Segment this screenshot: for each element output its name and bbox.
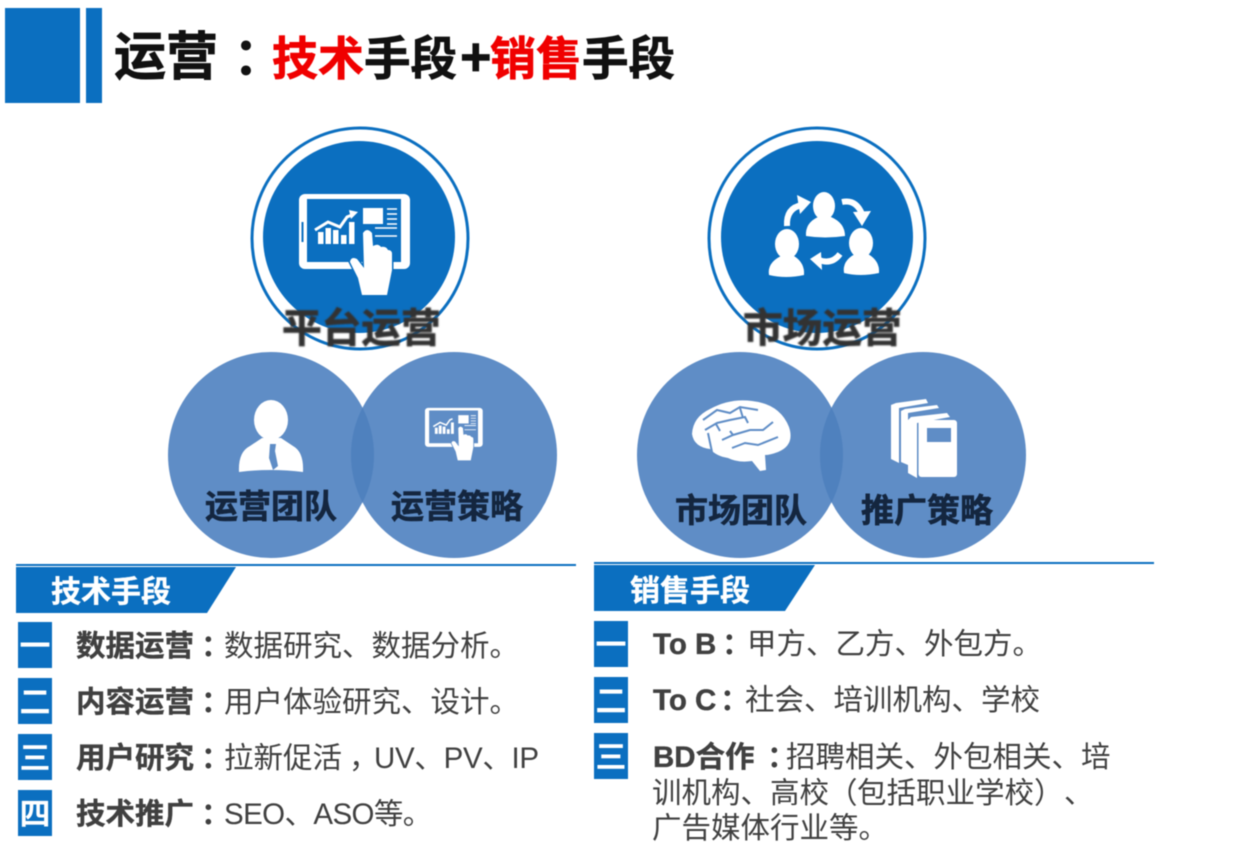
title: 手段 <box>582 33 675 85</box>
item 4: technical promotion: ： <box>201 791 231 833</box>
title: + <box>460 27 492 87</box>
item 1: data operations: 一 <box>20 621 50 666</box>
title: 手段 <box>364 33 457 85</box>
icon: books <box>891 399 957 478</box>
item 3: BD cooperation: 三 <box>596 732 626 777</box>
item 1: To B: ： <box>722 621 752 663</box>
heading: market operations: 市场运营 <box>743 307 902 351</box>
item 2: To C: 二 <box>596 676 626 721</box>
item 2: To C: ： <box>720 677 750 719</box>
item 3: BD cooperation: 、 <box>1064 777 1094 810</box>
label: promotion strategy: 推广策略 <box>861 492 993 529</box>
item 3: BD cooperation: ： <box>767 734 797 776</box>
circle: market team <box>637 352 843 558</box>
item 2: To C: 社会、培训机构、学校 <box>745 684 1040 717</box>
item 4: technical promotion: 四 <box>20 789 50 834</box>
item 3: user research: 三 <box>20 733 50 778</box>
item 3: user research: UV、PV、IP <box>374 742 539 775</box>
label: operations team: 运营团队 <box>205 488 337 525</box>
item 1: To B: To B <box>653 628 716 661</box>
banner: technical means <box>16 567 236 613</box>
label: operations strategy: 运营策略 <box>391 488 523 525</box>
item 3: BD cooperation <box>594 732 1111 845</box>
item 2: content operations: 二 <box>20 677 50 722</box>
title: 销售 <box>490 33 582 85</box>
circle: promotion strategy <box>820 352 1026 558</box>
badge: market operations <box>709 128 925 349</box>
title: 运营 <box>114 29 218 87</box>
overlap: market circles <box>820 408 843 502</box>
icon: brain <box>692 400 791 471</box>
banner: sales means: 销售手段 <box>630 575 750 608</box>
item 1: data operations: 数据研究、数据分析。 <box>224 630 519 663</box>
circle: operations team <box>168 352 374 558</box>
item 3: BD cooperation: 包括职业学校 <box>857 777 1034 810</box>
item 3: BD cooperation: 训机构、高校 <box>652 777 829 810</box>
header mark <box>5 8 102 103</box>
item 2: content operations: 用户体验研究、设计。 <box>224 686 519 719</box>
item 3: BD cooperation: BD合作 <box>653 741 755 774</box>
circle: operations strategy <box>351 352 557 558</box>
heading: platform operations: 平台运营 <box>282 307 441 351</box>
item 3: user research: 用户研究 <box>76 742 194 775</box>
item 4: technical promotion: 技术推广 <box>76 798 194 831</box>
title: 技术 <box>272 33 364 85</box>
item 1: To B <box>594 620 1042 667</box>
overlap: operations circles <box>351 408 374 502</box>
title: ： <box>233 15 285 90</box>
item 3: user research: ， <box>349 735 379 777</box>
item 2: To C: To C <box>653 684 716 717</box>
badge: platform operations <box>252 128 468 349</box>
item 3: user research <box>18 733 539 780</box>
item 4: technical promotion <box>18 789 432 836</box>
item 4: technical promotion: SEO、ASO等。 <box>224 798 432 831</box>
item 3: BD cooperation: （ <box>828 777 858 810</box>
icon: three people with cycle arrows <box>769 192 879 277</box>
panel: sales means <box>594 562 1154 845</box>
item 1: To B: 一 <box>596 620 626 665</box>
panel: technical means <box>16 564 576 836</box>
item 3: BD cooperation: 招聘相关、外包相关、培 <box>786 741 1111 774</box>
item 1: data operations: ： <box>201 623 231 665</box>
item 2: content operations <box>18 677 519 724</box>
item 3: BD cooperation: 广告媒体行业等。 <box>652 812 888 845</box>
icon: person in suit <box>239 400 303 472</box>
banner: sales means <box>594 565 815 611</box>
icon: tablet with touch hand <box>299 194 410 295</box>
item 1: data operations <box>18 621 519 668</box>
item 1: data operations: 数据运营 <box>76 630 194 663</box>
item 1: To B: 甲方、乙方、外包方。 <box>747 628 1042 661</box>
icon: small tablet with touch hand <box>425 408 483 460</box>
label: market team: 市场团队 <box>675 492 807 529</box>
item 3: user research: ： <box>201 735 231 777</box>
item 2: content operations: 内容运营 <box>76 686 194 719</box>
banner: technical means: 技术手段 <box>51 576 171 609</box>
item 2: To C <box>594 676 1040 723</box>
item 3: user research: 拉新促活 <box>224 742 342 775</box>
item 2: content operations: ： <box>201 679 231 721</box>
item 3: BD cooperation: ） <box>1034 777 1064 810</box>
